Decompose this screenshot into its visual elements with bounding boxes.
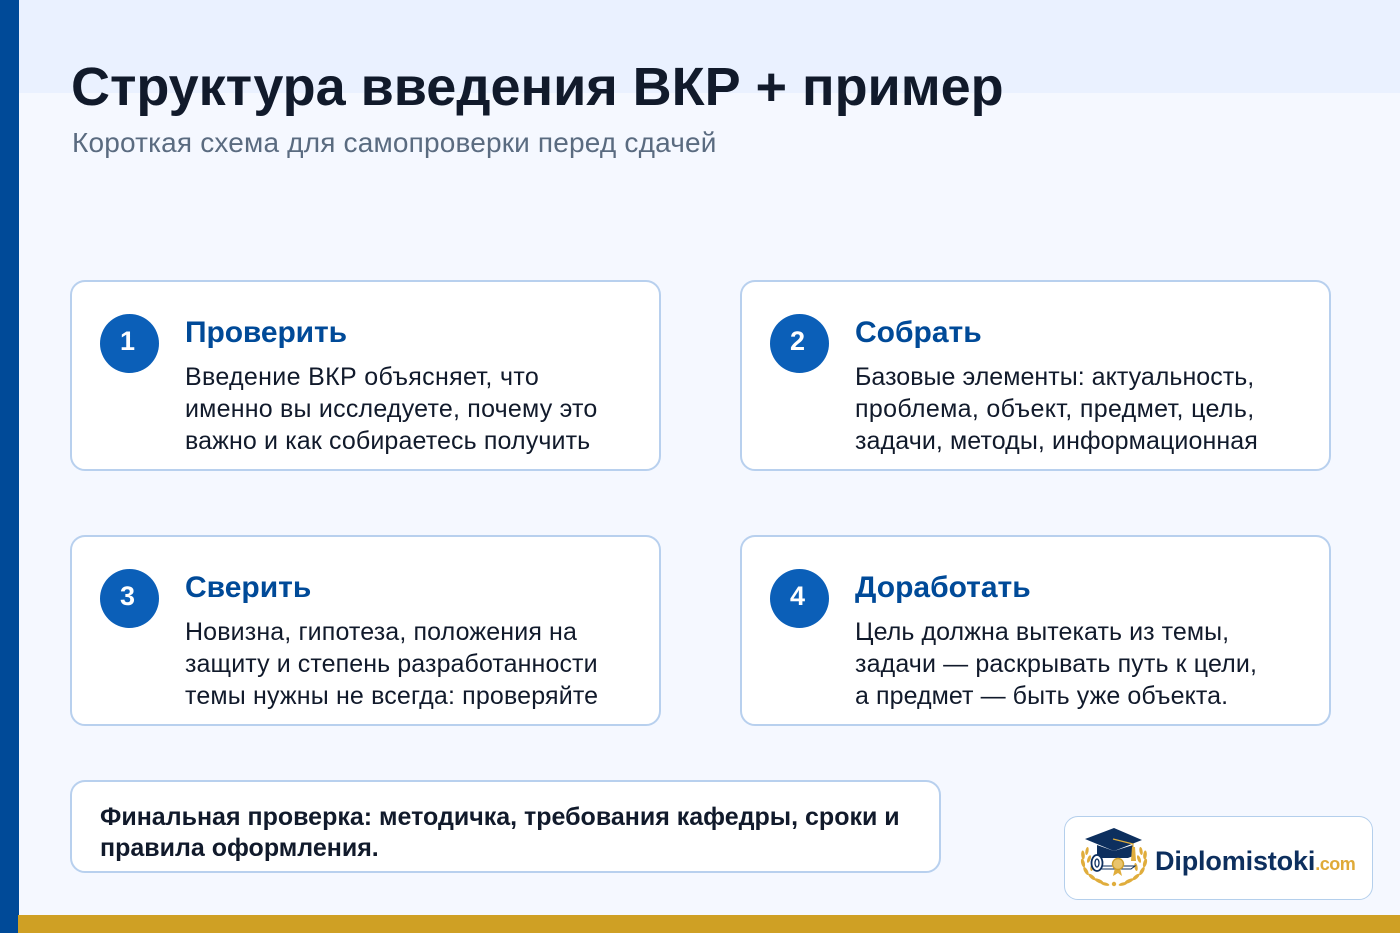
text: step 3: Новизна, гипотеза, положения на — [185, 618, 577, 646]
heading: Доработать: Доработать — [855, 571, 1031, 604]
heading: Проверить: Проверить — [185, 316, 347, 349]
text: step 2: задачи, методы, информационная — [855, 427, 1258, 455]
number badge 2 — [770, 314, 829, 373]
logo wordmark: Diplomistoki.com — [1155, 846, 1355, 876]
text: step 1: Введение ВКР объясняет, что — [185, 363, 539, 391]
number badge 1 — [100, 314, 159, 373]
text: step 3: темы нужны не всегда: проверяйте — [185, 682, 598, 710]
text: step 2: Базовые элементы: актуальность, — [855, 363, 1254, 391]
panel: step 4 — [740, 535, 1331, 726]
panel: step 2 — [740, 280, 1331, 471]
title: Структура введения ВКР + пример — [71, 57, 1004, 117]
text: step 2: проблема, объект, предмет, цель, — [855, 395, 1254, 423]
icon: graduation cap with laurel — [1080, 828, 1148, 886]
callout: final check — [70, 780, 941, 873]
text: step 4: а предмет — быть уже объекта. — [855, 682, 1228, 710]
text: step 4: Цель должна вытекать из темы, — [855, 618, 1229, 646]
subtitle: Короткая схема для самопроверки перед сдачей — [72, 127, 717, 158]
number badge 4: 4 — [790, 581, 805, 611]
text: step 3 — [185, 618, 598, 710]
text: step 2 — [855, 363, 1258, 455]
callout text: Финальная проверка: методичка, требования кафедры, сроки и — [100, 803, 900, 831]
text: step 3: защиту и степень разработанности — [185, 650, 598, 678]
number badge 1: 1 — [120, 326, 135, 356]
left accent bar — [0, 0, 19, 933]
panel: step 1 — [70, 280, 661, 471]
logo card — [1064, 816, 1373, 900]
text: step 1 — [185, 363, 598, 455]
text: step 1: важно и как собираетесь получить — [185, 427, 590, 455]
panel: step 3 — [70, 535, 661, 726]
number badge 3: 3 — [120, 581, 135, 611]
text: step 4 — [855, 618, 1257, 710]
number badge 3 — [100, 569, 159, 628]
header band — [19, 0, 1400, 93]
text: step 4: задачи — раскрывать путь к цели, — [855, 650, 1257, 678]
bottom accent bar — [18, 915, 1400, 933]
number badge 2: 2 — [790, 326, 805, 356]
callout text — [100, 803, 900, 862]
heading: Собрать: Собрать — [855, 316, 982, 349]
number badge 4 — [770, 569, 829, 628]
text: step 1: именно вы исследуете, почему это — [185, 395, 598, 423]
callout text: правила оформления. — [100, 834, 379, 862]
heading: Сверить: Сверить — [185, 571, 311, 604]
